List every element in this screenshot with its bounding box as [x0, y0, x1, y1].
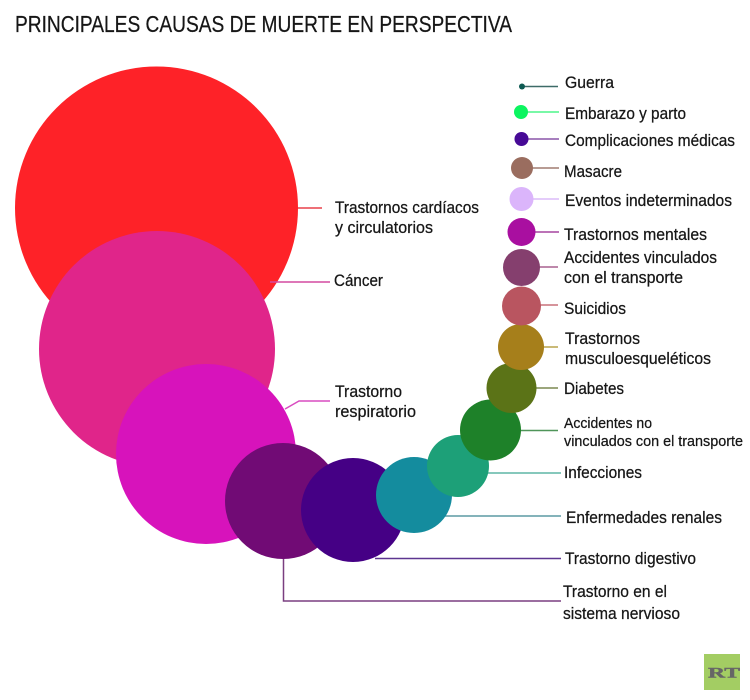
item: complicaciones médicas: Complicaciones médicas [565, 132, 735, 150]
item: infecciones [427, 435, 642, 497]
item: trastorno digestivo [301, 458, 696, 568]
item: diabetes: Diabetes [564, 380, 624, 398]
item: trastorno en el sistema nervioso: sistema nervioso [563, 605, 680, 623]
item: accidentes no vinculados [460, 400, 743, 460]
item: suicidios: Suicidios [564, 300, 626, 318]
item: eventos indeterminados [510, 187, 732, 211]
item: accidentes vinculados con el transporte [503, 249, 717, 287]
item: trastorno respiratorio: Trastorno [335, 383, 402, 401]
item: enfermedades renales [376, 457, 722, 533]
item: cáncer [39, 231, 383, 467]
item: trastornos musculoesqueléticos: Trastornos [565, 330, 640, 348]
item: embarazo y parto: Embarazo y parto [565, 105, 686, 123]
item: suicidios [502, 286, 626, 326]
item: trastornos mentales: Trastornos mentales [564, 226, 707, 244]
logo: RT [704, 654, 740, 690]
item: accidentes no vinculados: Accidentes no [564, 415, 652, 432]
item: trastorno digestivo: Trastorno digestivo [565, 550, 696, 568]
item: accidentes vinculados con el transporte: con el transporte [564, 269, 683, 287]
item: trastorno en el sistema nervioso: Trastorno en el [563, 583, 667, 601]
item: embarazo y parto [514, 105, 686, 123]
item: guerra: Guerra [565, 74, 615, 92]
logo: RT: RT [708, 666, 740, 682]
item: trastornos cardíacos: y circulatorios [335, 219, 433, 237]
item: trastornos mentales [508, 218, 707, 246]
item: eventos indeterminados: Eventos indeterminados [565, 192, 732, 210]
item: trastorno en el sistema nervioso [225, 443, 680, 623]
item: masacre [511, 157, 622, 181]
item: masacre: Masacre [564, 163, 622, 181]
item: accidentes no vinculados: vinculados con el transporte [564, 433, 743, 450]
item: diabetes [486, 363, 624, 413]
item: trastorno respiratorio: respiratorio [335, 403, 416, 421]
item: cáncer: Cáncer [334, 272, 383, 290]
item: trastornos cardíacos [15, 66, 479, 350]
item: enfermedades renales: Enfermedades renales [566, 509, 722, 527]
bubble chart [15, 66, 743, 623]
item: infecciones: Infecciones [564, 464, 642, 482]
item: trastornos cardíacos: Trastornos cardíacos [335, 199, 479, 217]
item: trastornos musculoesqueléticos [498, 324, 711, 370]
item: guerra [519, 74, 615, 92]
title: PRINCIPALES CAUSAS DE MUERTE EN PERSPECTIVA [15, 11, 513, 37]
item: trastorno respiratorio [116, 364, 416, 544]
item: accidentes vinculados con el transporte: Accidentes vinculados [564, 249, 717, 267]
item: trastornos musculoesqueléticos: musculoesqueléticos [565, 350, 711, 368]
